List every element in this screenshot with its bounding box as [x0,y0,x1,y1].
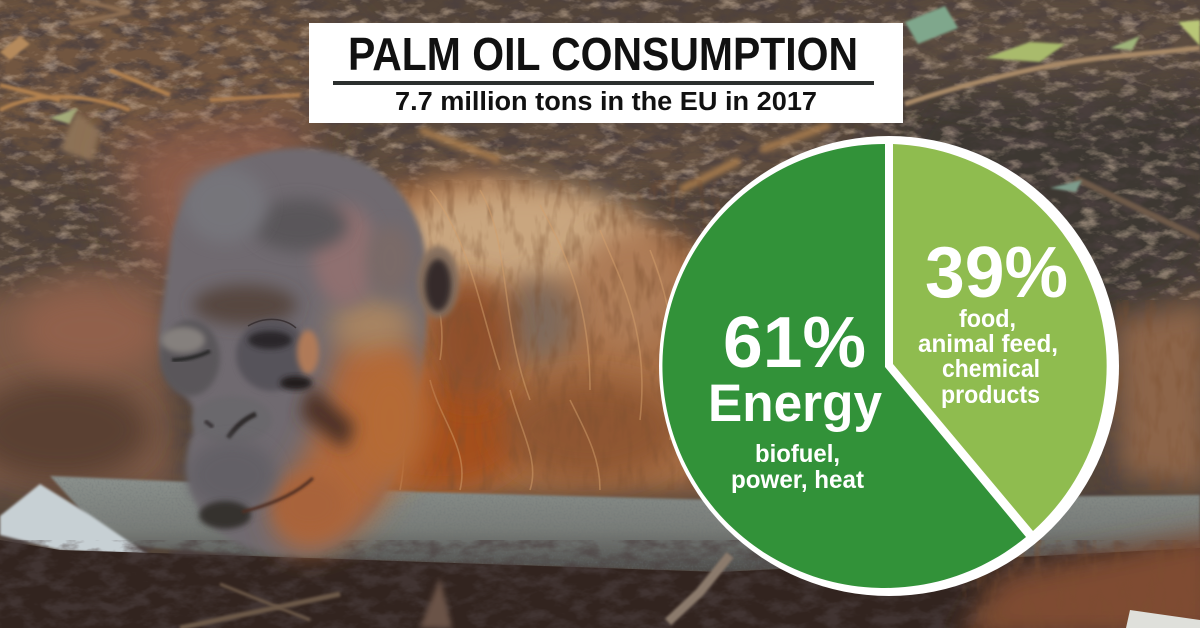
orangutan face [159,148,459,555]
brow [193,285,297,325]
lower right warm face [272,326,422,552]
slice: other 39% [893,144,1107,531]
right eye [236,319,319,391]
head and jaw [159,148,427,555]
label: 61% energy: Energy [708,374,882,433]
label: 39% food: food, [959,305,1016,333]
slice: energy 61% [662,144,1026,588]
label: 61% energy: biofuel, [755,440,840,468]
orangutan fur body [0,115,1200,500]
label: 39% food: products [941,381,1040,409]
log the orangutan rests on [0,474,1200,572]
label: 61% energy: 61% [723,303,866,383]
label: 61% energy: power, heat [731,466,865,494]
label: 39% food [918,233,1068,409]
dark band beside eye [300,385,355,450]
label: 61% energy [708,303,882,494]
label: 39% food: 39% [925,233,1068,313]
dark foreground [0,530,1200,628]
ear [417,246,459,318]
subtitle: 7.7 million tons in the EU in 2017 [395,88,817,116]
nose [192,396,272,444]
left eye [160,320,220,396]
title panel [309,23,903,123]
mouth [242,478,313,512]
label: 39% food: chemical [942,355,1040,383]
pie chart [659,136,1119,596]
label: 39% food: animal feed, [918,330,1058,358]
muzzle [188,441,276,509]
title heading: PALM OIL CONSUMPTION [348,28,858,80]
